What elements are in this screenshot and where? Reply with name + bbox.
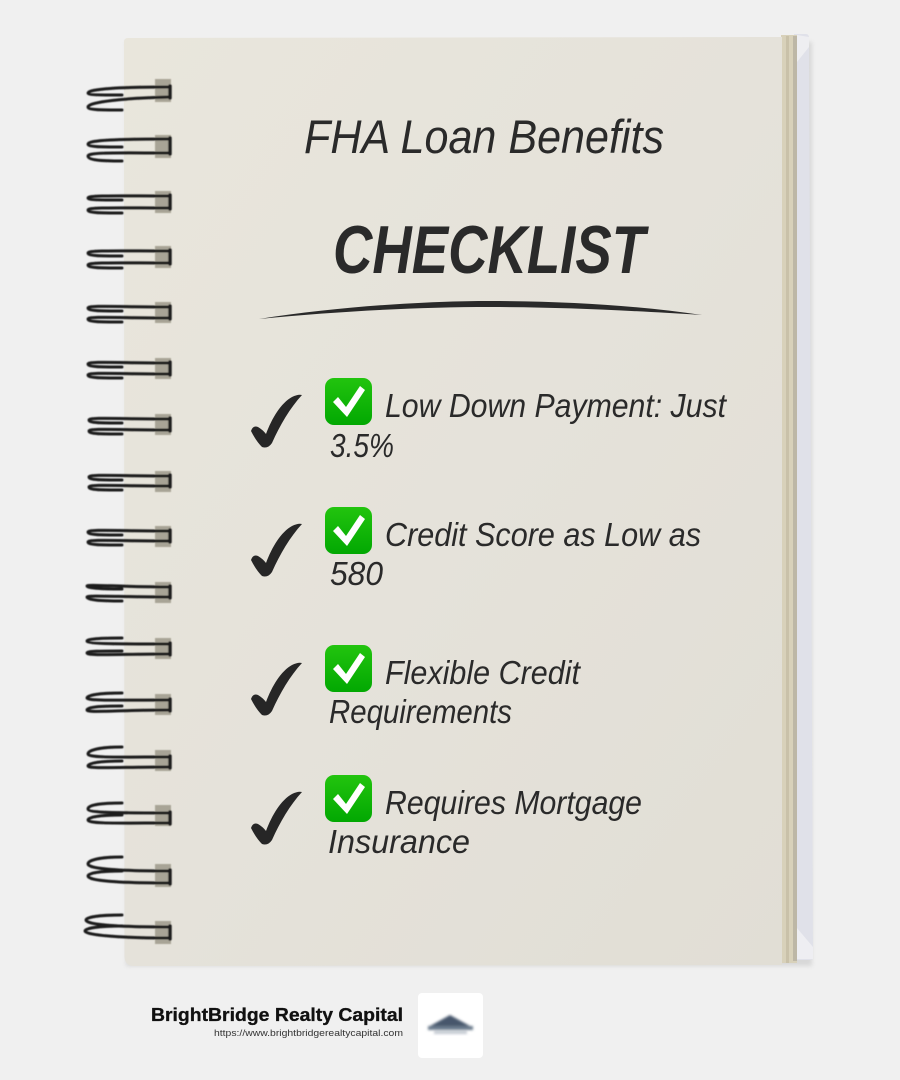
icon: green check box bbox=[325, 507, 372, 554]
item text: Low Down Payment: Just bbox=[385, 387, 728, 424]
underline swoosh bbox=[259, 301, 702, 319]
footer url: https://www.brightbridgerealtycapital.com bbox=[214, 1028, 403, 1039]
item text wrap: Requirements bbox=[329, 693, 512, 730]
icon: black check bbox=[251, 524, 302, 576]
ring 7 bbox=[89, 414, 171, 435]
footer brand name: BrightBridge Realty Capital bbox=[151, 1005, 403, 1025]
icon: black check bbox=[251, 792, 302, 844]
ring 1 bbox=[88, 79, 171, 110]
logo card bbox=[418, 993, 483, 1058]
checklist item 3 bbox=[251, 645, 582, 730]
item text: Flexible Credit bbox=[385, 654, 582, 691]
ring 2 bbox=[88, 135, 171, 161]
icon: black check bbox=[251, 395, 302, 448]
ring 4 bbox=[88, 246, 171, 268]
item text wrap: 580 bbox=[330, 555, 384, 592]
spiral binding bbox=[85, 79, 171, 944]
item text wrap: 3.5% bbox=[330, 427, 394, 464]
checklist item 4 bbox=[251, 775, 642, 860]
item text: Credit Score as Low as bbox=[385, 516, 701, 553]
ring 12 bbox=[87, 693, 171, 715]
ring 16 bbox=[85, 915, 171, 944]
title: FHA Loan Benefits: FHA Loan Benefits bbox=[304, 110, 664, 163]
heading: CHECKLIST: CHECKLIST bbox=[333, 212, 649, 288]
checklist item 2 bbox=[251, 507, 701, 592]
checklist item 1 bbox=[251, 378, 728, 464]
ring 13 bbox=[88, 747, 171, 771]
page edges bbox=[781, 35, 797, 963]
back cover bbox=[794, 34, 813, 960]
ring 9 bbox=[88, 526, 171, 547]
ring 3 bbox=[88, 191, 171, 213]
ring 8 bbox=[89, 471, 171, 492]
ring 14 bbox=[88, 803, 171, 826]
ring 11 bbox=[87, 638, 171, 659]
ring 15 bbox=[88, 857, 171, 887]
ring 10 bbox=[87, 582, 171, 603]
item text wrap: Insurance bbox=[328, 823, 470, 860]
icon: green check box bbox=[325, 378, 372, 425]
ring 6 bbox=[88, 358, 171, 379]
paper page bbox=[124, 37, 782, 966]
notebook body bbox=[124, 34, 813, 966]
icon: green check box bbox=[325, 645, 372, 692]
icon: green check box bbox=[325, 775, 372, 822]
icon: blurred house logo bbox=[428, 1015, 473, 1034]
item text: Requires Mortgage bbox=[385, 784, 642, 821]
cover corner fold bottom bbox=[797, 928, 813, 959]
cover corner fold top bbox=[797, 35, 809, 62]
ring 5 bbox=[88, 302, 171, 323]
icon: black check bbox=[251, 663, 302, 716]
